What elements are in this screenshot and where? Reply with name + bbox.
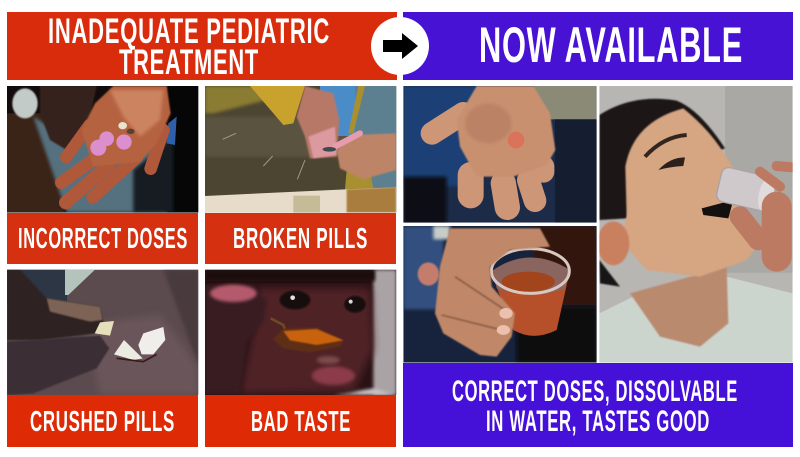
icon: arrow in white circle	[371, 17, 429, 75]
header: inadequate pediatric treatment	[7, 12, 397, 82]
label: bad taste	[205, 395, 396, 447]
photo: hands breaking a pill	[205, 86, 396, 213]
photo: hand holding pink pills	[7, 86, 198, 213]
header: inadequate pediatric treatment: TREATMENT	[119, 43, 259, 82]
photo: child and spoon of medicine	[205, 270, 396, 395]
label: broken pills	[205, 213, 396, 264]
label: broken pills: BROKEN PILLS	[233, 223, 368, 255]
label: incorrect doses	[7, 213, 198, 264]
panel: bad taste	[205, 270, 396, 447]
panel: now available photos and benefits	[403, 86, 793, 447]
panel: crushed pills	[7, 270, 198, 447]
label: crushed pills: CRUSHED PILLS	[30, 406, 175, 438]
header: now available	[403, 12, 793, 80]
photo: crushed pill on palm	[7, 270, 198, 395]
photo: hand holding cup of orange medicine	[403, 226, 597, 363]
header: inadequate pediatric treatment: INADEQUATE PEDIATRIC	[48, 12, 330, 51]
photo: boy drinking from medicine cup	[597, 86, 793, 363]
photo: child's hand with tablet	[403, 86, 597, 223]
label: incorrect doses: INCORRECT DOSES	[18, 223, 188, 255]
label: crushed pills	[7, 395, 198, 447]
label: correct doses, dissolvable, tastes good	[403, 363, 793, 447]
label: bad taste: BAD TASTE	[251, 406, 351, 438]
panel: incorrect doses	[7, 86, 198, 264]
panel: broken pills	[205, 86, 396, 264]
